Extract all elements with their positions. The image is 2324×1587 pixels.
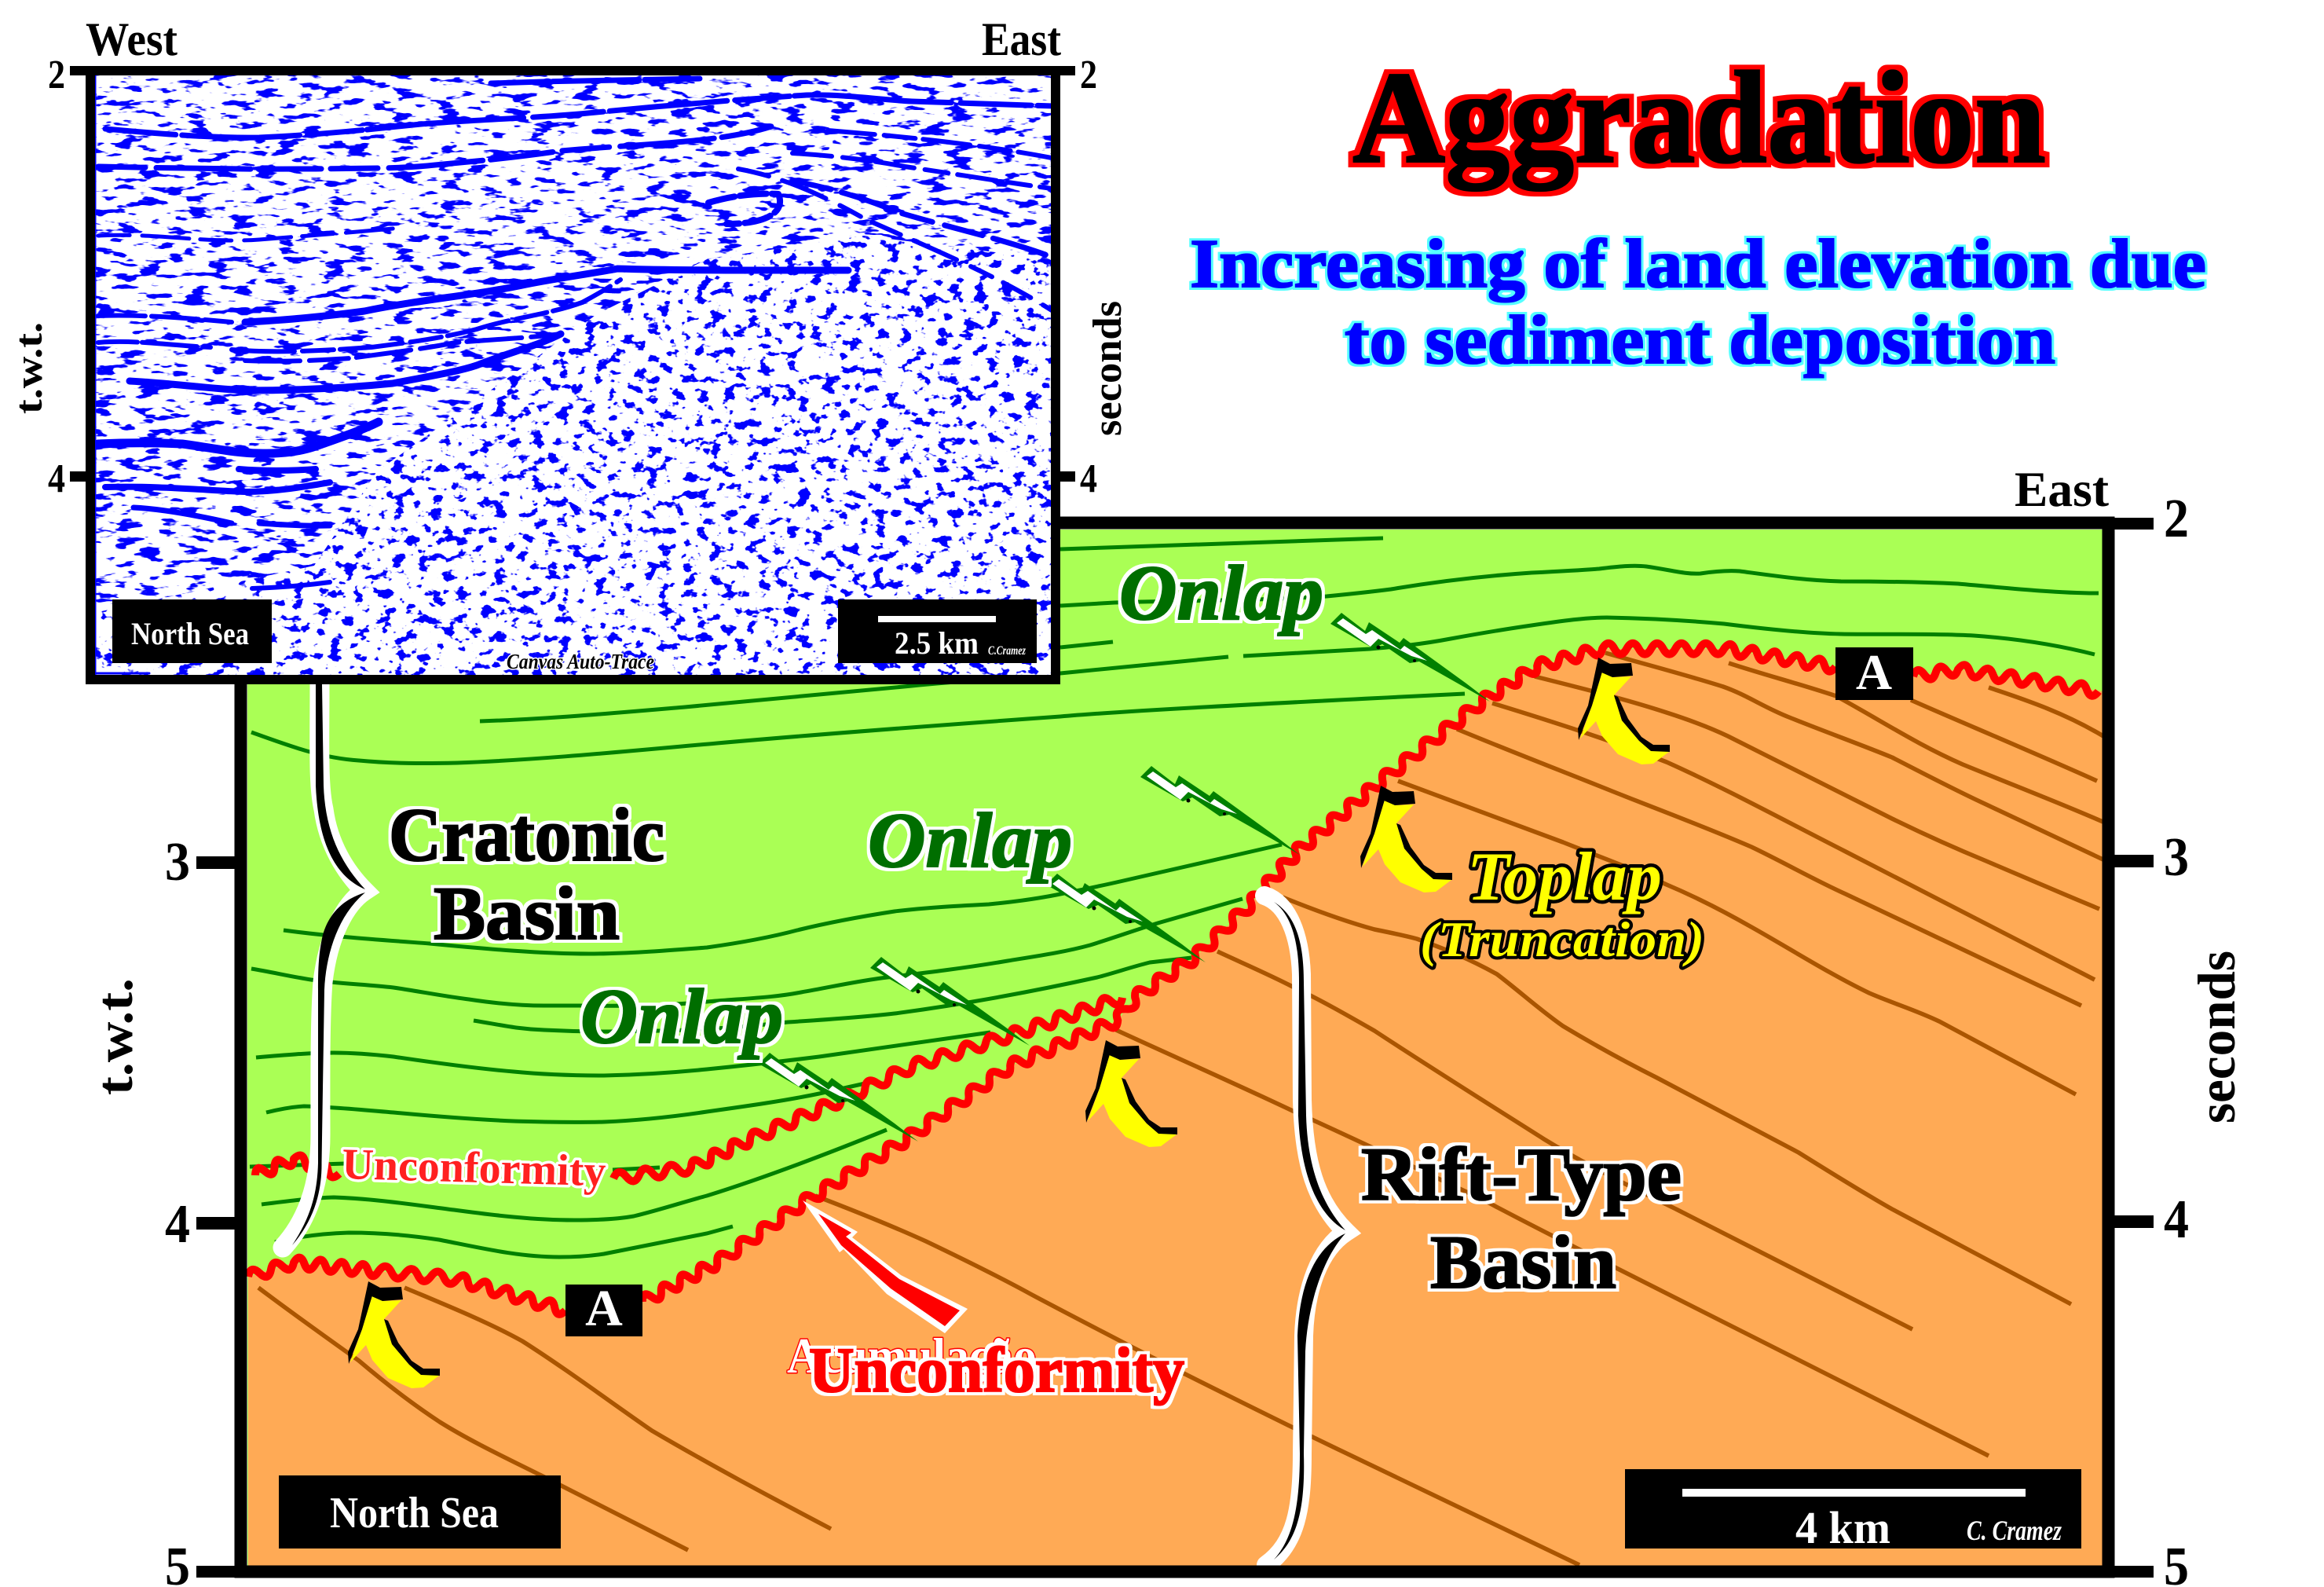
seismic axis numbers (48, 53, 1097, 501)
axis numbers left: 4 (165, 1194, 190, 1255)
subtitle (1190, 226, 2206, 379)
icon: onlap arrow lowest (759, 1053, 918, 1142)
label: Rift-Type Basin: Rift-Type (1361, 1132, 1682, 1216)
label: Onlap lower: Onlap (580, 973, 783, 1060)
brace: rift-type basin (1264, 896, 1346, 1565)
label: East: East (982, 13, 1061, 65)
label: large Unconformity: Unconformity (809, 1334, 1184, 1406)
axis numbers right: 4 (2164, 1189, 2189, 1250)
label box A right (1835, 644, 1913, 700)
frame and axis ticks (196, 518, 2154, 1578)
basin fill: green cratonic basin (247, 530, 2103, 1566)
panel: geological interpretation section (86, 461, 2246, 1587)
axis numbers left (165, 832, 190, 1587)
label: Rift-Type Basin: Basin (1430, 1220, 1616, 1304)
seismic axis numbers: 4 (1080, 456, 1097, 501)
seismic axis numbers: 2 (48, 53, 65, 97)
icon: toplap arrow beside Toplap label (1360, 786, 1452, 892)
rift basin fill: orange pre-rift section (248, 649, 2103, 1566)
seismic background (90, 71, 1056, 680)
upper unconformity (wavy red line) (255, 998, 1122, 1181)
axis title: seconds right: seconds (2187, 951, 2246, 1123)
label: West: West (86, 13, 178, 65)
axis title: seconds: seconds (1085, 301, 1130, 436)
panel: seismic line inset (6, 13, 1130, 680)
axis title: t.w.t.: t.w.t. (6, 322, 50, 414)
axis numbers right: 3 (2164, 827, 2189, 888)
seismic noise texture: chaotic lower right zone (96, 236, 1051, 675)
axis title: t.w.t. left: t.w.t. (86, 978, 144, 1095)
scale bar: 2.5 km: C.Cramez (988, 644, 1027, 658)
watermark: Canvas Auto-Trace: Canvas Auto-Trace (507, 650, 654, 673)
axis numbers right: 2 (2164, 489, 2189, 549)
label: Onlap top: Onlap (1119, 549, 1323, 636)
icon: toplap arrow on left (348, 1281, 440, 1388)
scale bar: 2.5 km: 2.5 km (895, 625, 979, 661)
label box A right: A (1856, 644, 1892, 700)
label box: North Sea: North Sea (330, 1489, 499, 1538)
icon: toplap arrow on slope (1085, 1040, 1177, 1147)
axis numbers right (2164, 489, 2189, 1587)
label box A left: A (585, 1280, 623, 1337)
label: East: East (2015, 461, 2110, 517)
subtitle: Increasing of land elevation due (1190, 226, 2206, 302)
label box: North Sea (112, 599, 272, 663)
green onlapping reflectors (250, 538, 2099, 1257)
icon: onlap arrow upper right (1330, 613, 1490, 702)
label: Toplap: Toplap (1467, 839, 1662, 915)
seismic axis numbers: 2 (1080, 53, 1097, 97)
seismic frame and ticks (70, 66, 1075, 680)
seismic strong reflectors (95, 75, 1052, 675)
label box: North Sea: North Sea (131, 616, 249, 651)
scale bar: 2.5 km (838, 599, 1037, 663)
seismic noise texture: layered upper and left zone (96, 75, 1051, 604)
title: Aggradation (1352, 45, 2046, 191)
scale bar: 4 km: C. Cramez (1967, 1515, 2062, 1546)
icon: onlap arrow lower middle (870, 957, 1030, 1046)
icon: toplap arrow at crest (1578, 658, 1670, 764)
scale bar: 4 km: 4 km (1795, 1502, 1890, 1553)
label: Onlap middle: Onlap (868, 797, 1072, 884)
icon: onlap arrow centre (1046, 874, 1206, 962)
label: Cratonic Basin: Basin (434, 871, 620, 955)
lower unconformity A (wavy red line) (248, 643, 2099, 1314)
label: Cratonic Basin: Cratonic (389, 793, 664, 877)
arrow: red arrow to the unconformity (803, 1200, 968, 1333)
brace: cratonic basin (283, 684, 365, 1248)
label box A left (565, 1280, 642, 1337)
label box: North Sea (279, 1475, 561, 1549)
axis numbers left: 3 (165, 832, 190, 892)
icon: onlap arrow middle (1140, 766, 1300, 855)
subtitle: to sediment deposition (1345, 302, 2055, 379)
seismic axis numbers: 4 (48, 456, 65, 501)
label: (Truncation): (Truncation) (1420, 911, 1704, 967)
scale bar: 4 km (1625, 1469, 2081, 1553)
label: Acumulação (overprinted): Acumulação (787, 1328, 1037, 1384)
label: small Unconformity: Unconformity (342, 1140, 606, 1196)
label: Cratonic Basin (389, 793, 664, 955)
brown dipping reflectors truncated by the unconformity (258, 653, 2108, 1565)
label: Rift-Type Basin (1361, 1132, 1682, 1304)
